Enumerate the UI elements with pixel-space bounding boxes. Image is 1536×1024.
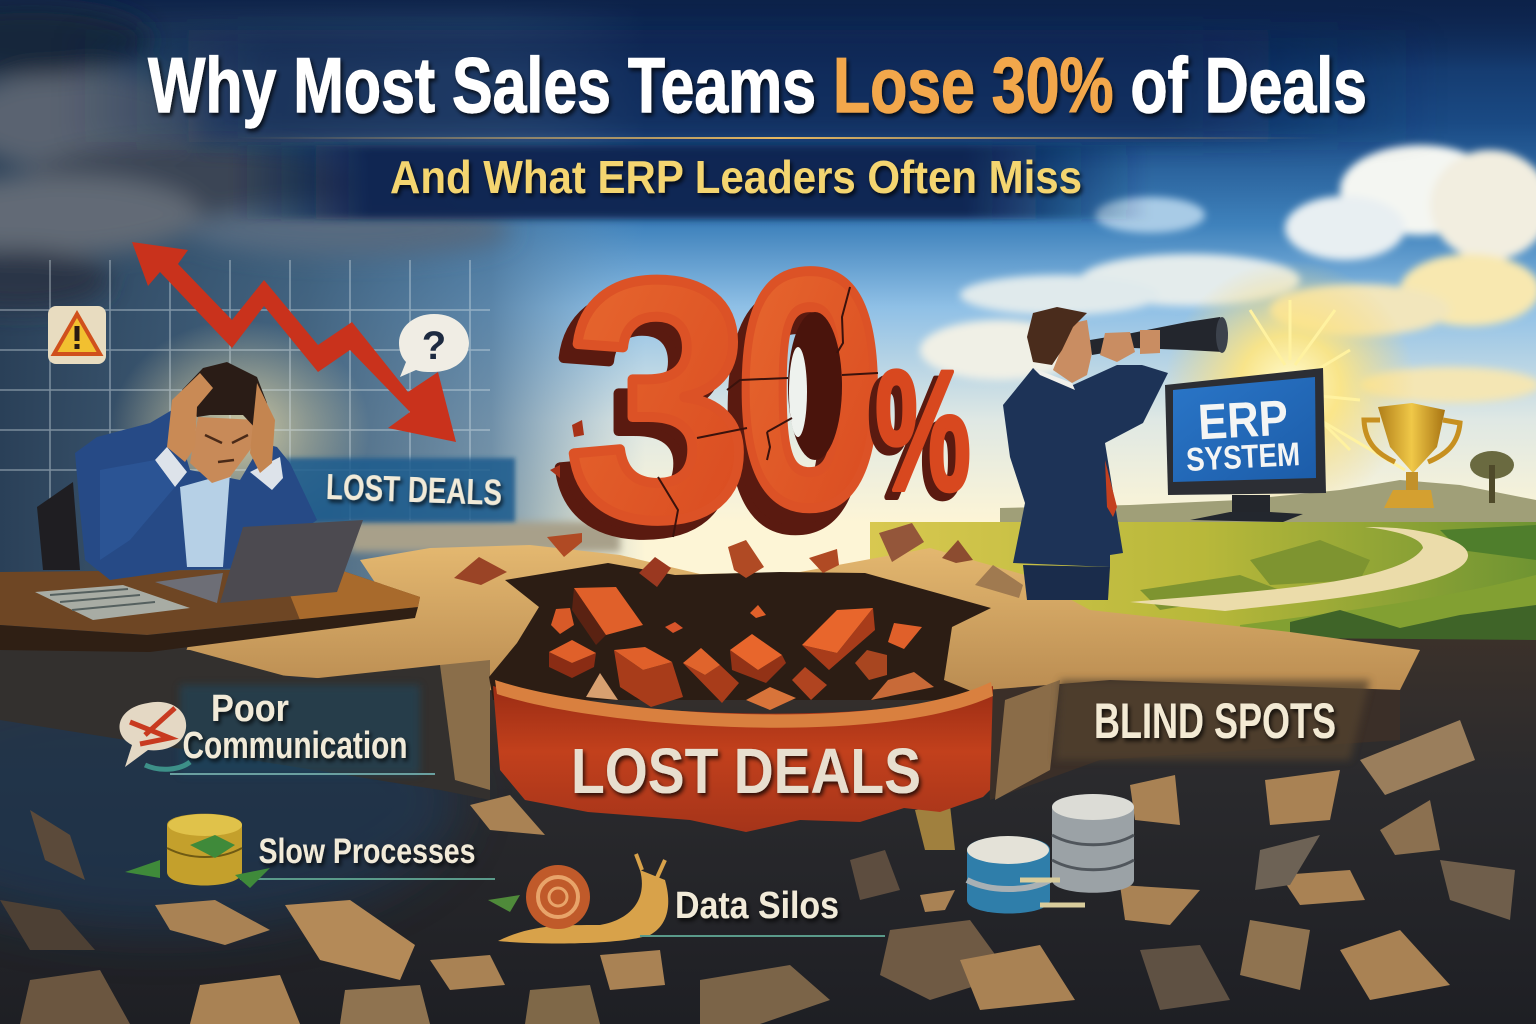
slow processes label: Slow Processes bbox=[258, 832, 476, 871]
title rule bbox=[240, 137, 1320, 139]
stressed businessman bbox=[37, 362, 317, 580]
sand and cliff around the pit bbox=[0, 545, 1420, 800]
flying rocks bbox=[454, 523, 1023, 598]
big 30 percent: 0 bbox=[721, 224, 871, 598]
meadow and path bbox=[870, 480, 1536, 660]
pit bbox=[489, 563, 993, 700]
ERP system monitor: ERP bbox=[1197, 390, 1289, 450]
poor communication label: Poor bbox=[211, 688, 289, 730]
cracked rock field bbox=[0, 720, 1515, 1024]
man with telescope bbox=[1003, 307, 1168, 600]
big 30 percent: 3 bbox=[552, 224, 737, 604]
icon: stacked coins bbox=[125, 814, 270, 888]
big 30 percent: % bbox=[868, 342, 964, 534]
laptop bbox=[155, 520, 363, 603]
blue haze lower left bbox=[0, 670, 460, 930]
lost deals banner bbox=[493, 680, 993, 832]
sunny clouds bbox=[920, 145, 1536, 403]
big 30 percent: 0 bbox=[735, 202, 885, 576]
subtitle: And What ERP Leaders Often Miss bbox=[390, 151, 1082, 203]
icon: database cylinders bbox=[967, 794, 1134, 914]
icon: question bubble bbox=[399, 314, 469, 377]
lost deals banner: LOST DEALS bbox=[571, 735, 921, 807]
title: Why Most Sales Teams Lose 30% of Deals bbox=[148, 41, 1367, 129]
blind spots label: BLIND SPOTS bbox=[1094, 693, 1336, 749]
big 30 percent: 3 bbox=[566, 210, 751, 590]
data silos label: Data Silos bbox=[675, 885, 839, 927]
icon: warning sign bbox=[48, 306, 106, 364]
icon: snail bbox=[488, 854, 668, 943]
ERP system monitor: SYSTEM bbox=[1185, 435, 1301, 478]
icon: question bubble: ? bbox=[422, 324, 446, 368]
ERP system monitor bbox=[1165, 368, 1326, 522]
telescope bbox=[1090, 317, 1228, 362]
desk bbox=[0, 570, 420, 652]
poor communication label: Communication bbox=[182, 725, 408, 767]
label: lost deals upper bbox=[285, 458, 515, 522]
broken bricks bbox=[549, 587, 934, 710]
sun glow and rays bbox=[1165, 260, 1415, 510]
storm clouds bbox=[0, 5, 510, 310]
icon: chat bubbles bbox=[119, 702, 190, 769]
gold trophy bbox=[1364, 403, 1460, 508]
down arrow bbox=[132, 242, 456, 442]
chart backdrop behind lost deals arrow bbox=[0, 260, 490, 520]
distant tree bbox=[1470, 451, 1514, 503]
ground bbox=[0, 618, 1536, 1024]
blind spots label bbox=[1055, 680, 1370, 760]
title band bbox=[60, 30, 1440, 219]
big 30 percent bbox=[550, 202, 971, 604]
big 30 percent: % bbox=[875, 335, 971, 527]
label: lost deals upper: LOST DEALS bbox=[325, 466, 503, 513]
poor communication label bbox=[170, 685, 435, 775]
